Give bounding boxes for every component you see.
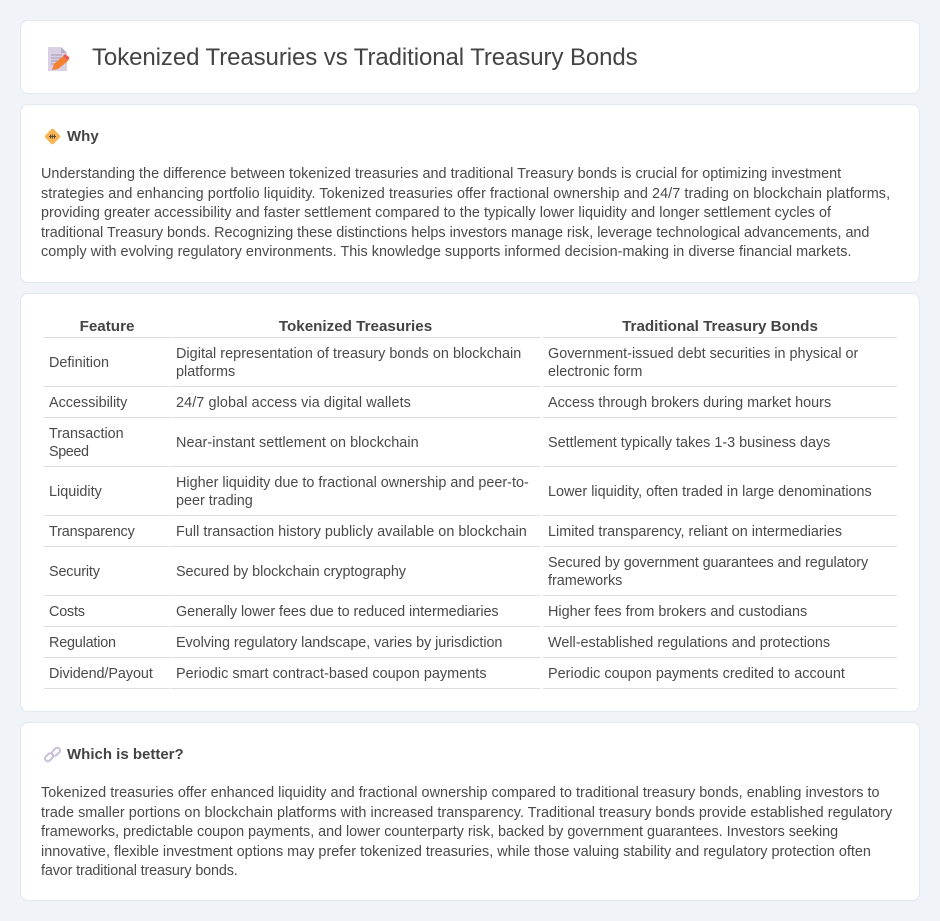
text block: why: Understanding the difference between tokenized treasuries and traditional Treasury bonds is crucial for optimizing investment: [41, 166, 841, 182]
row: security: frameworks: [548, 573, 622, 589]
text block: which is better: innovative, flexible investment options may prefer tokenized treasuries, while those valuing stability and regulatory protection often: [41, 844, 871, 860]
row: transparency: Full transaction history publicly available on blockchain: [176, 524, 527, 540]
heading: which is better: Which is better?: [67, 746, 184, 763]
row: accessibility: [49, 395, 831, 411]
row: definition: Definition: [49, 355, 109, 371]
table header: feature: Feature: [80, 318, 134, 335]
row: transparency: [49, 524, 842, 540]
row: security: Secured by government guarantees and regulatory: [548, 555, 868, 571]
row: transaction speed: Speed: [49, 444, 89, 460]
text block: why: providing greater accessibility and faster settlement compared to the typically lower liquidity and longer settlement cycles of: [41, 205, 831, 221]
row: security: Security: [49, 564, 100, 580]
row: definition: Digital representation of treasury bonds on blockchain: [176, 346, 521, 362]
row: liquidity: Lower liquidity, often traded in large denominations: [548, 484, 872, 500]
row: regulation: [49, 635, 830, 651]
table header: tokenized treasuries: Tokenized Treasuries: [279, 318, 432, 335]
row: transaction speed: [49, 426, 830, 460]
text block: which is better: [41, 785, 892, 879]
row: transaction speed: Transaction: [49, 426, 124, 442]
row: definition: Government-issued debt securities in physical or: [548, 346, 858, 362]
title: Tokenized Treasuries vs Traditional Treasury Bonds: [92, 44, 638, 71]
row: liquidity: [49, 475, 872, 509]
icon: diamond warning sign: [44, 128, 60, 144]
row: costs: [49, 604, 807, 620]
row: dividend/payout: Dividend/Payout: [49, 666, 153, 682]
row: security: Secured by blockchain cryptography: [176, 564, 406, 580]
text block: why: traditional Treasury bonds. Recognizing these distinctions helps investors manage risk, leverage technological advancements, and: [41, 225, 869, 241]
row: dividend/payout: [49, 666, 845, 682]
panel: header: [20, 20, 920, 94]
text block: why: strategies and enhancing portfolio liquidity. Tokenized treasuries offer fractional ownership and 24/7 trading on blockchain platforms,: [41, 186, 890, 202]
row: definition: platforms: [176, 364, 235, 380]
row: costs: Generally lower fees due to reduced intermediaries: [176, 604, 499, 620]
text block: why: [41, 166, 890, 260]
row: regulation: Regulation: [49, 635, 116, 651]
row: accessibility: 24/7 global access via digital wallets: [176, 395, 411, 411]
row: transparency: Limited transparency, reliant on intermediaries: [548, 524, 842, 540]
panel: comparison table: [20, 293, 920, 712]
row: costs: Costs: [49, 604, 85, 620]
row: transaction speed: Near-instant settlement on blockchain: [176, 435, 419, 451]
text block: which is better: frameworks, predictable coupon payments, and lower counterparty risk, backed by government guarantees. Investors seeking: [41, 824, 838, 840]
table header: traditional treasury bonds: Traditional Treasury Bonds: [622, 318, 818, 335]
row: liquidity: peer trading: [176, 493, 253, 509]
row: regulation: Well-established regulations and protections: [548, 635, 830, 651]
row: transaction speed: Settlement typically takes 1-3 business days: [548, 435, 830, 451]
icon: document with pencil: [48, 47, 70, 71]
text block: which is better: trade smaller portions on blockchain platforms with increased transparency. Traditional treasury bonds provide established regulatory: [41, 805, 892, 821]
row: costs: Higher fees from brokers and custodians: [548, 604, 807, 620]
row: definition: [49, 346, 858, 380]
text block: why: comply with evolving regulatory environments. This knowledge supports informed decision-making in diverse financial markets.: [41, 244, 852, 260]
row: security: [49, 555, 868, 589]
row: accessibility: Accessibility: [49, 395, 127, 411]
panel: why: [20, 104, 920, 283]
text block: which is better: Tokenized treasuries offer enhanced liquidity and fractional ownership compared to traditional treasury bonds, enabling investors to: [41, 785, 880, 801]
row: liquidity: Higher liquidity due to fractional ownership and peer-to-: [176, 475, 529, 491]
row: dividend/payout: Periodic coupon payments credited to account: [548, 666, 845, 682]
row: definition: electronic form: [548, 364, 642, 380]
text block: which is better: favor traditional treasury bonds.: [41, 863, 238, 879]
row: regulation: Evolving regulatory landscape, varies by jurisdiction: [176, 635, 502, 651]
row: dividend/payout: Periodic smart contract-based coupon payments: [176, 666, 487, 682]
icon: chain link: [44, 746, 61, 762]
row: liquidity: Liquidity: [49, 484, 102, 500]
panel: which is better: [20, 722, 920, 901]
row: accessibility: Access through brokers during market hours: [548, 395, 831, 411]
row: transparency: Transparency: [49, 524, 135, 540]
heading: why: Why: [67, 128, 99, 145]
